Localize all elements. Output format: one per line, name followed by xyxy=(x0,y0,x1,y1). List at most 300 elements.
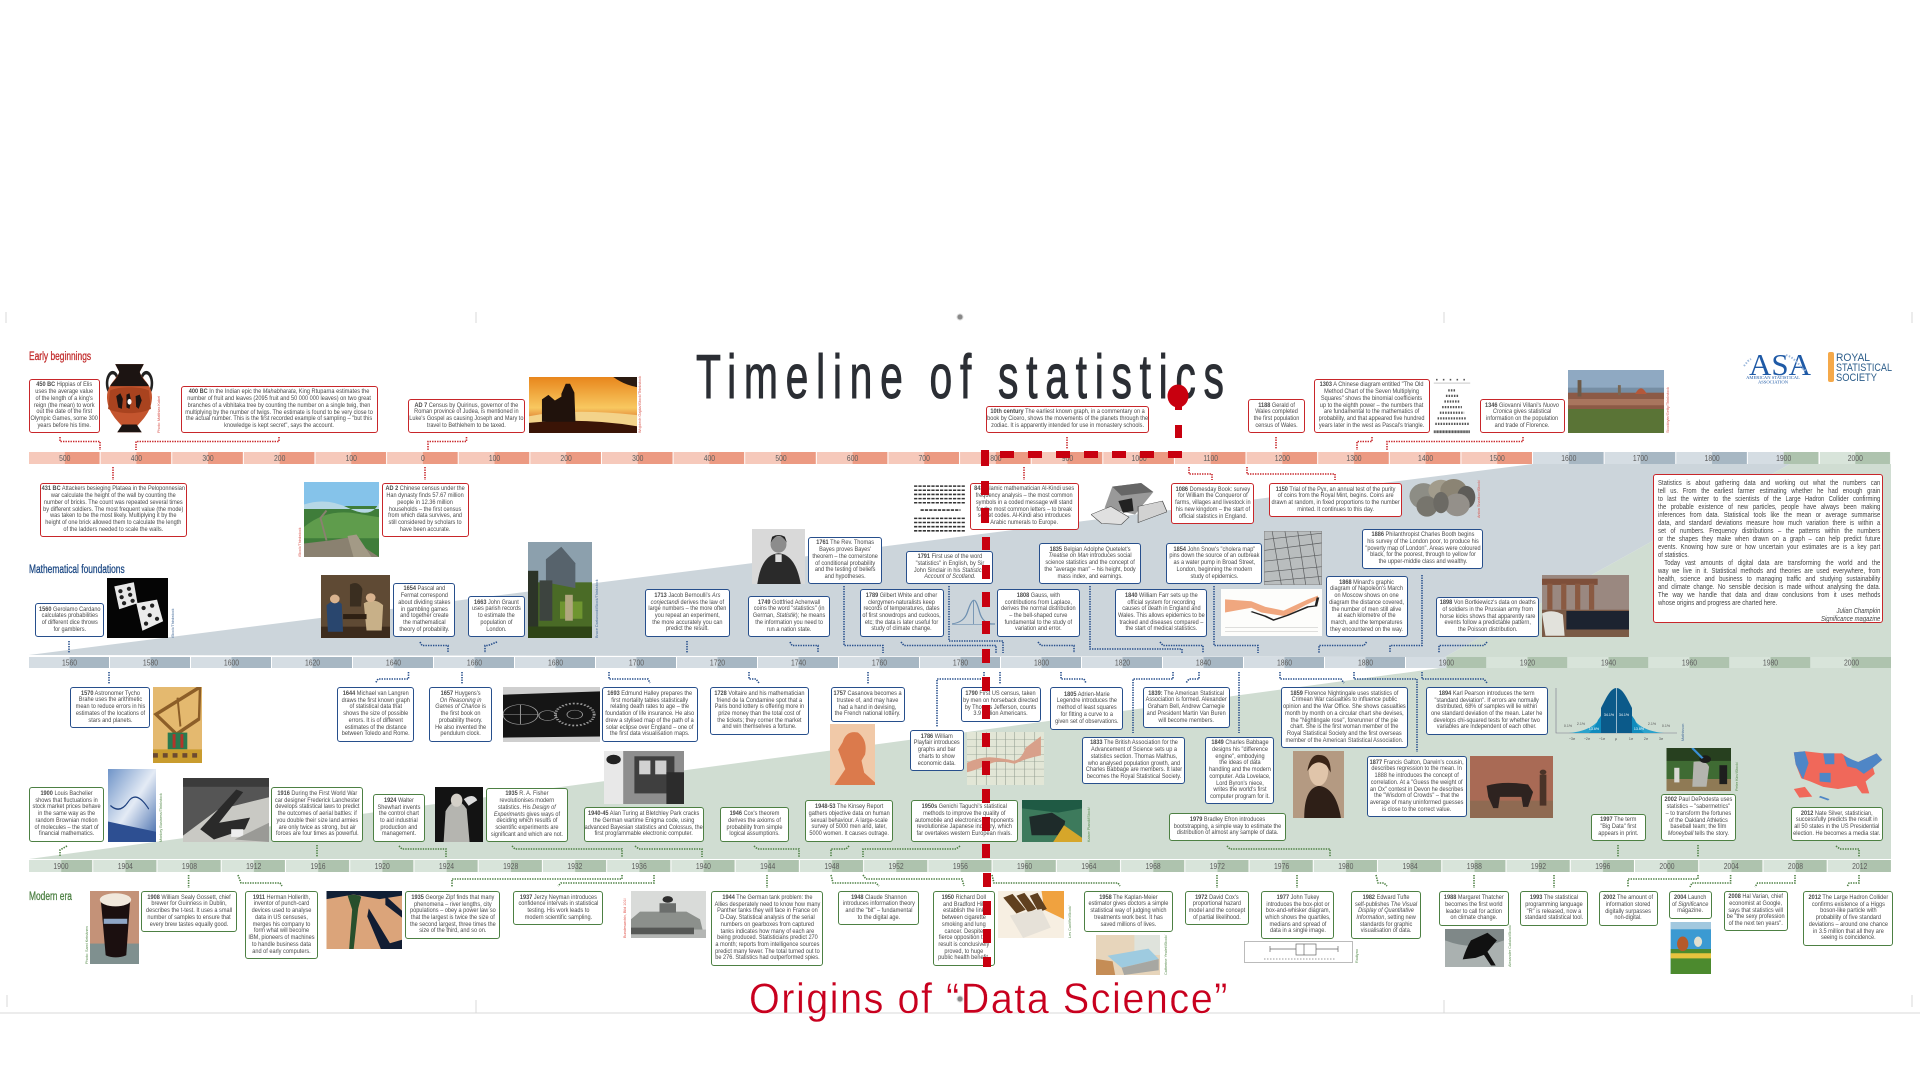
event: 1950 Doll and Hill: cancer. Despite xyxy=(945,928,983,934)
event: 431 BC Plataea: height of one brick allowed them to calculate the length xyxy=(45,519,182,526)
event: 1894 Pearson: one standard deviation of the mean. Later he xyxy=(1431,710,1543,717)
event: 1644 van Langren xyxy=(337,687,414,742)
event: 1898 Von Bortkiewicz: events follow a predictable pattern, xyxy=(1444,619,1531,626)
event: 1840 Farr: tracked and diseases compared – xyxy=(1119,619,1203,626)
timeline: 500 BC to AD 2000: 500 xyxy=(59,453,70,463)
timeline: 1560 to 2000: 1940 xyxy=(1601,658,1616,668)
event: 1849 Babbage: designs his "difference xyxy=(1212,746,1267,753)
event: 2012 Higgs boson xyxy=(1803,891,1893,946)
event: 1805 Legendre: for fitting a curve to a xyxy=(1060,711,1113,718)
image: Tycho Brahe quadrant xyxy=(153,687,202,763)
timeline: 1560 to 2000: 1760 xyxy=(872,658,887,668)
event: 1663 Graunt: 1663 John Graunt xyxy=(474,599,519,606)
event: 1859 Nightingale: 1859 Florence Nightingale uses statistics of xyxy=(1291,690,1398,697)
image: US election map xyxy=(1794,751,1882,800)
event: 1693 Halley: 1693 Edmund Halley prepares the xyxy=(608,690,692,697)
timeline: 500 BC to AD 2000: 400 xyxy=(704,453,715,463)
event: 1728 Voltaire: friend de la Condamine spot that a xyxy=(717,697,802,704)
event: 1948-53 Kinsey xyxy=(805,800,893,842)
event: 1894 Pearson: 1894 Karl Pearson introduces the term xyxy=(1439,690,1535,697)
event: 450 BC Hippias: Olympic Games, some 300 xyxy=(31,415,98,422)
image: Galton ox xyxy=(1470,756,1553,818)
event: 1713 Bernoulli: you repeat an experiment, xyxy=(655,612,720,619)
event: 400 BC sampling: number of fruit and leaves (2095 fruit and 50 000 000 leaves) on two great xyxy=(188,395,371,402)
event: 1654 Pascal and Fermat: in gambling games xyxy=(401,606,447,613)
event: 1786 Playfair: Playfair introduces xyxy=(914,739,960,746)
timeline: 1900 to 2012: 1984 xyxy=(1403,861,1418,871)
image: great wall of china xyxy=(304,482,379,557)
event: 1728 Voltaire: Paris bond lottery is offering more in xyxy=(715,703,804,710)
event: 1950 Doll and Hill: result is conclusively xyxy=(939,941,989,948)
event: 1877 Galton: average of many uninformed guesses xyxy=(1370,799,1464,806)
event: 1570 Tycho Brahe: estimates of the locations of xyxy=(75,710,145,717)
event: 1993 R language xyxy=(1520,891,1588,926)
event: 1713 Bernoulli: large numbers – the more often xyxy=(649,605,727,612)
event: 1935 Fisher: deciding which results of xyxy=(497,817,557,824)
event: AD 7 Census by Quirinus: Luke's Gospel as causing Joseph and Mary to xyxy=(409,415,524,422)
event: 1791 Sinclair: "statistics" in English, by Sir xyxy=(915,560,984,567)
event: 1086 Domesday Book: for William the Conqueror of xyxy=(1178,492,1247,499)
image: Arabic manuscript xyxy=(914,485,965,532)
event: 1560 Cardano: of different dice throws xyxy=(41,619,98,626)
event: 400 BC sampling: multiplying by the number of twigs. The estimate is found to be very close to xyxy=(186,408,373,416)
photo credits: Wojciech Gajda/iStock/Thinkstock xyxy=(638,376,642,433)
event: 1859 Nightingale: the "Nightingale rose", forerunner of the pie xyxy=(1291,716,1398,724)
event: 1728 Voltaire: and win themselves a fortune. xyxy=(722,723,797,730)
image: greek vase xyxy=(106,364,154,432)
timeline: 1900 to 2012: 1952 xyxy=(889,861,904,871)
event: 1786 Playfair: 1786 William xyxy=(921,733,953,740)
event: 1977 Tukey: medians and spread of xyxy=(1269,921,1326,928)
event: 1972 Cox: of partial likelihood. xyxy=(1193,914,1241,921)
event: 1908 Gosset: brewer for Guinness in Dublin, xyxy=(151,900,227,907)
event: 2012 Higgs boson: 2012 The Large Hadron Collider xyxy=(1808,894,1888,901)
event: 1849 Babbage: the ideas of data xyxy=(1219,759,1260,766)
event: 10th century graph: zodiac. It is apparently intended for use in monastery schools. xyxy=(991,422,1144,429)
event: 1900 Bachelier: stock market prices behave xyxy=(32,803,101,810)
photo credits: Catherine Yeulet/iStock/ xyxy=(1164,934,1168,975)
panel: introduction text: set of numbers. Frequency distributions – the patterns within the numbers xyxy=(1658,526,1880,535)
photo credits: Alexander Cakala/iStock/ xyxy=(1508,924,1512,967)
event: 1916 Lanchester: forces are four times as powerful. xyxy=(276,830,358,837)
timeline: 500 BC to AD 2000: 1400 xyxy=(1418,453,1433,463)
event: 1150 Trial of the Pyx: drawn at random, in fixed proportions to the number xyxy=(1271,499,1400,506)
event: 1757 Casanova: the French national lottery. xyxy=(835,710,901,717)
event: 1935 Fisher xyxy=(486,788,568,842)
event: AD 2 Chinese census: households – the first census xyxy=(389,506,462,513)
panel: introduction text: Significance magazine xyxy=(1821,614,1880,623)
event: 1977 Tukey: which shows the quartiles, xyxy=(1265,914,1330,921)
event: 1303 Chinese diagram: Squares" shows the binomial coefficients xyxy=(1321,395,1423,402)
timeline: 1900 to 2012: 1944 xyxy=(760,861,776,871)
event: 1086 Domesday Book: 1086 Domesday Book: survey xyxy=(1175,486,1250,493)
event: 450 BC Hippias: of the length of a king's xyxy=(36,395,93,402)
timeline: 1900 to 2012: 1904 xyxy=(118,861,133,871)
event: 1693 Halley xyxy=(602,687,698,742)
event: 2012 Higgs boson: boson-like particle with xyxy=(1820,907,1876,914)
panel: introduction text: the probable existence of new particles, people have always been making xyxy=(1658,502,1880,511)
event: 2002 DePodesta: statistics – "sabermetrics" xyxy=(1667,803,1730,810)
event: 1877 Galton: 1888 he introduces the concept of xyxy=(1375,772,1459,779)
timeline: 500 BC to AD 2000: 900 xyxy=(1062,453,1073,463)
event: AD 7 Census by Quirinus: Roman province of Judea, is mentioned in xyxy=(414,408,519,415)
event: 1693 Halley: relating death rates to age – the xyxy=(611,703,689,710)
event: 450 BC Hippias xyxy=(29,379,100,433)
event: 1839 American Statistical Association: and President Martin Van Buren xyxy=(1147,710,1226,717)
event: 1346 Villani xyxy=(1480,399,1565,433)
event: 1346 Villani: and trade of Florence. xyxy=(1495,422,1550,429)
event: 1560 Cardano: calculates probabilities xyxy=(41,612,98,619)
event: 431 BC Plataea xyxy=(40,483,187,537)
event: 1839 American Statistical Association: Association is formed. Alexander xyxy=(1146,696,1227,703)
event: 1188 Gerald of Wales: census of Wales. xyxy=(1255,422,1298,429)
event: 2002 digital storage: information stored xyxy=(1606,901,1651,908)
event: 2002 DePodesta: 2002 Paul DePodesta uses xyxy=(1665,796,1732,803)
event: 431 BC Plataea: 431 BC Attackers besieging Plataea in the Peloponnesian xyxy=(42,485,185,492)
event: 843 Al-Kindi: Arabic numerals to Europe. xyxy=(991,519,1058,526)
event: 1911 Hollerith xyxy=(245,891,318,959)
timeline: 1560 to 2000: 1900 xyxy=(1439,658,1454,668)
event: 1560 Cardano: for gamblers. xyxy=(53,626,86,633)
event: 1950s Taguchi: automobile and electronics components xyxy=(915,817,1014,824)
image: Guinness pint xyxy=(90,891,139,964)
event: 1937 Neyman xyxy=(513,891,603,925)
event: 1946 Cox: probability from simple xyxy=(727,824,782,830)
event: 1789 Gilbert White: 1789 Gilbert White and other xyxy=(866,592,938,599)
event: 1944 German tank problem xyxy=(711,891,823,966)
event: 1693 Halley: foundation of life insurance. He also xyxy=(606,710,694,717)
event: 1859 Nightingale: Crimean War casualties to influence public xyxy=(1292,696,1397,703)
connectors: mathematical foundations events to blue timeline xyxy=(69,575,1487,752)
event: AD 2 Chinese census xyxy=(382,483,469,537)
panel: introduction text: Julian Champkin xyxy=(1836,606,1880,615)
event: 2008 Varian xyxy=(1724,891,1788,931)
event: 1911 Hollerith: merges his company to xyxy=(253,921,310,928)
chart: normal distribution: 1σ xyxy=(1629,737,1634,741)
event: 1789 Gilbert White: records of temperatures, dates xyxy=(864,605,940,612)
timeline: 1900 to 2012: 1976 xyxy=(1274,861,1289,871)
event: 1950 Doll and Hill: and Bradford Hill xyxy=(943,901,985,908)
image: windblown tree xyxy=(1445,929,1504,967)
event: 2002 DePodesta: of the Oakland Athletics xyxy=(1669,816,1728,824)
event: 1886 Booth: the upper-middle class and wealthy. xyxy=(1378,558,1467,565)
event: 1911 Hollerith: inventor of punch-card xyxy=(254,900,309,907)
event: 1854 John Snow: 1854 John Snow's "cholera map" xyxy=(1173,546,1255,553)
event: 1808 Gauss: fundamental to the study of xyxy=(1005,619,1072,626)
chart: normal distribution: −3σ xyxy=(1569,737,1576,741)
event: 1972 Cox: 1972 David Cox's xyxy=(1195,894,1239,901)
event: 1940-45 Turing: 1940-45 Alan Turing at Bletchley Park cracks xyxy=(588,810,700,817)
event: 1948-53 Kinsey: 1948-53 The Kinsey Report xyxy=(815,803,883,810)
timeline: 500 BC to AD 2000: 1200 xyxy=(1275,453,1290,463)
timeline: 500 BC to AD 2000: 400 xyxy=(131,453,142,463)
event: 431 BC Plataea: number of bricks. The count was repeated several times xyxy=(44,499,183,506)
image: blue stock chart xyxy=(108,769,156,842)
event: 1849 Babbage: engine", embodying xyxy=(1215,753,1264,760)
timeline: 1560 to 2000: 1700 xyxy=(629,658,644,668)
chart: normal distribution: 13.6% xyxy=(1589,727,1600,731)
event: 431 BC Plataea: of the ladders needed to scale the walls. xyxy=(64,526,163,533)
event: 1859 Nightingale: Royal Statistical Society and the first overseas xyxy=(1287,730,1402,737)
event: 1898 Von Bortkiewicz: horse kicks shows that apparently rare xyxy=(1440,613,1535,620)
event: 1950 Doll and Hill: fierce opposition the xyxy=(939,934,989,941)
event: 431 BC Plataea: by different soldiers. The most frequent value (the mode) xyxy=(43,506,184,513)
event: 1150 Trial of the Pyx xyxy=(1269,483,1402,517)
event: 1859 Nightingale: chart. She is the first woman member of the xyxy=(1290,723,1399,730)
timeline: 1560 to 2000: 1920 xyxy=(1520,658,1535,668)
event: 1886 Booth: "poverty map of London". Areas were coloured xyxy=(1365,545,1480,552)
event: 1644 van Langren: draws the first known graph xyxy=(341,697,410,704)
event: 1946 Cox: 1946 Cox's theorem xyxy=(730,810,779,817)
timeline: 500 BC to AD 2000: 2000 xyxy=(1848,453,1863,463)
event: 1911 Hollerith: and of early computers. xyxy=(252,948,311,955)
event: 1877 Galton: 1877 Francis Galton, Darwin's cousin, xyxy=(1370,759,1464,766)
event: 1924 Shewhart xyxy=(373,794,425,842)
event: 1789 Gilbert White: clergymen-naturalists keep xyxy=(869,599,935,606)
event: 1757 Casanova: 1757 Casanova becomes a xyxy=(834,690,902,697)
wedge: grey mathematical foundations era xyxy=(29,464,1790,657)
image: Playfair chart xyxy=(967,732,1044,785)
event: 1911 Hollerith: form what will become xyxy=(254,927,309,934)
image: first world war planes xyxy=(183,778,269,842)
timeline: 1560 to 2000: 1980 xyxy=(1763,658,1778,668)
image: tank xyxy=(631,891,706,938)
timeline: 500 BC to AD 2000: 1300 xyxy=(1346,453,1362,463)
event: 1786 Playfair: economic data. xyxy=(918,760,956,767)
chart: normal distribution: 13.6% xyxy=(1634,727,1645,731)
event: 2008 Varian: economist at Google, xyxy=(1730,900,1782,907)
event: 1900 Bachelier: of molecules – the start of xyxy=(34,824,99,831)
event: 1693 Halley: solar eclipse over England – one of xyxy=(606,724,694,731)
timeline: 1560 to 2000: 1820 xyxy=(1115,658,1130,668)
event: 2012 Higgs boson: confirms existence of a Higgs xyxy=(1811,901,1885,908)
photo credits: Bundesarchiv, Bild 101I xyxy=(623,898,627,938)
event: 1570 Tycho Brahe: mean to reduce errors in his xyxy=(75,703,145,710)
heading: early beginnings: Early beginnings xyxy=(29,351,91,363)
event: 1868 Minard: 1868 Minard's graphic xyxy=(1340,579,1394,586)
red marker dot xyxy=(1168,384,1188,408)
timeline: 500 BC to AD 2000: 700 xyxy=(919,453,930,463)
event: 2012 Nate Silver: successfully predicts the result in xyxy=(1796,816,1878,823)
event: 1839 American Statistical Association: will become members. xyxy=(1159,717,1214,724)
event: 1570 Tycho Brahe xyxy=(70,687,150,728)
event: 1713 Bernoulli xyxy=(645,589,730,637)
timeline: 1900 to 2012: 1920 xyxy=(375,861,390,871)
event: 1988 Thatcher: on climate change. xyxy=(1451,914,1497,921)
timeline: 500 BC to AD 2000: 1100 xyxy=(1203,453,1218,463)
event: 1935 Fisher: statistics. His Design of xyxy=(498,804,556,811)
event: 1849 Babbage: 1849 Charles Babbage xyxy=(1211,739,1268,746)
event: 1868 Minard: they encountered on the way. xyxy=(1331,626,1403,633)
event: 1977 Tukey: data in a single image. xyxy=(1270,927,1325,934)
event: 1835 Quetelet: 1835 Belgian Adolphe Quetelet's xyxy=(1050,546,1130,553)
panel: introduction text: health, science and business to managing traffic and studying sustainability xyxy=(1658,574,1880,583)
photo credits: iStock/Thinkstock xyxy=(171,608,175,638)
event: 1693 Halley: the first data visualisation maps. xyxy=(610,730,690,737)
event: AD 7 Census by Quirinus: AD 7 Census by Quirinus, governor of the xyxy=(415,402,518,409)
event: 1868 Minard: on Moscow shows on one xyxy=(1335,592,1399,599)
event: 1911 Hollerith: devices used to analyse xyxy=(252,907,311,914)
event: 1950 Doll and Hill xyxy=(933,891,995,966)
panel: introduction text: Statistics is about gathering data and working out what the numbers can xyxy=(1658,478,1880,487)
event: 1833 British Association: Advancement of Science sets up a xyxy=(1090,746,1177,753)
event: 1728 Voltaire: prize money than the total cost of xyxy=(718,710,801,717)
timeline: 1560 to 2000: 1660 xyxy=(467,658,482,668)
panel: introduction text: and climate change. No sensible decision is made without analysing the data. xyxy=(1658,582,1880,591)
event: 1859 Nightingale: opinion and the War Office. She shows casualties xyxy=(1283,703,1406,710)
event: 1654 Pascal and Fermat: Fermat correspond xyxy=(400,592,448,599)
event: 2012 Nate Silver: election. He becomes a media star. xyxy=(1793,830,1881,837)
event: 1944 German tank problem: D-Day. Statistical analysis of the serial xyxy=(720,914,814,921)
timeline: 1560 to 2000: 1800 xyxy=(1034,658,1049,668)
event: 843 Al-Kindi xyxy=(970,483,1079,530)
event: 1900 Bachelier: 1900 Louis Bachelier xyxy=(40,790,93,797)
timeline: 1900 to 2012: 2012 xyxy=(1852,861,1867,871)
event: 1944 German tank problem: being produced. Statisticians predict 270 xyxy=(717,934,817,941)
event: 2008 Varian: be "the sexy profession xyxy=(1727,913,1785,920)
event: 1900 Bachelier: in the same way as the xyxy=(38,810,95,817)
event: 1790 first US census: 3.9 million Americans. xyxy=(974,710,1028,717)
event: 1713 Bernoulli: predict the result. xyxy=(666,625,709,632)
event: 1944 German tank problem: be 276. Statistics had outperformed spies. xyxy=(715,954,819,961)
image: dice xyxy=(107,578,168,638)
event: 1982 Tufte xyxy=(1351,891,1421,939)
event: 1749 Achenwall: 1749 Gottfried Achenwall xyxy=(758,599,820,606)
event: 1346 Villani: 1346 Giovanni Villani's Nuovo xyxy=(1485,402,1560,409)
timeline: 1900 to 2012: 1948 xyxy=(824,861,839,871)
event: 1805 Legendre: Legendre introduces the xyxy=(1056,697,1117,704)
event: 1946 Cox: derives the axioms of xyxy=(728,817,781,824)
event: 1663 Graunt: London. xyxy=(486,626,507,633)
event: 1663 Graunt: population of xyxy=(480,619,513,626)
event: 1657 Huygens: He also invented the xyxy=(435,724,486,731)
chart: normal distribution: μ xyxy=(1615,737,1617,741)
photo credits: Les Cunliffe/iStock/ xyxy=(1068,905,1072,938)
connectors: early beginnings events to red timeline xyxy=(60,437,1523,480)
event: 1972 Cox: model and the concept xyxy=(1189,907,1245,914)
event: 1950s Taguchi xyxy=(911,800,1018,842)
chart: normal distribution: 2.1% xyxy=(1577,722,1586,726)
event: 1789 Gilbert White: etc; the data is later useful for xyxy=(865,619,939,626)
panel: introduction text: The way we handle that data and draw conclusions from it uses methods xyxy=(1658,590,1880,599)
event: 1693 Halley: drew a stylised map of the path of a xyxy=(606,717,694,724)
event: 2012 Higgs boson: seeing is coincidence. xyxy=(1821,934,1875,941)
photo credits: Stockbyte/Getty/Thinkstock xyxy=(1666,387,1670,433)
event: 1908 Gosset: number of samples to ensure that xyxy=(147,914,231,921)
timeline: 1900 to 2012: 1916 xyxy=(310,861,326,871)
event: 1948 Shannon: introduces information theory xyxy=(842,900,915,907)
event: 1808 Gauss: derives the normal distribution xyxy=(1001,605,1076,612)
timeline: 500 BC to AD 2000: 0 xyxy=(421,453,425,463)
timeline: 500 BC to AD 2000: 100 xyxy=(346,453,357,463)
event: 1935 Zipf: phenomena – river lengths, city xyxy=(414,901,491,908)
event: 1663 Graunt: uses parish records xyxy=(472,605,521,612)
event: 1303 Chinese diagram: 1303 A Chinese diagram entitled "The Old xyxy=(1320,381,1424,388)
event: 1937 Neyman: modern scientific sampling. xyxy=(524,914,592,921)
event: 1911 Hollerith: to handle business data xyxy=(252,941,311,948)
event: 1908 Gosset xyxy=(141,891,237,932)
event: 1303 Chinese diagram: up to the eighth power – the numbers that xyxy=(1320,402,1424,409)
event: 1894 Pearson: develops chi-squared tests for whether two xyxy=(1434,717,1540,724)
timeline: 500 BC to AD 2000: 200 xyxy=(274,453,285,463)
event: 1839 American Statistical Association: 1839: The American Statistical xyxy=(1149,690,1224,697)
timeline: 1560 to 2000: 1960 xyxy=(1682,658,1697,668)
event: 2002 digital storage: 2002 The amount of xyxy=(1604,894,1653,901)
event: 1854 John Snow xyxy=(1166,543,1262,584)
event: 1940-45 Turing: first programmable electronic computer. xyxy=(595,830,693,837)
event: 10th century graph: book by Cicero, shows the movements of the planets through the xyxy=(987,415,1148,422)
event: 450 BC Hippias: years before his time. xyxy=(38,422,91,429)
event: 1761 Bayes: of conditional probability xyxy=(815,560,875,566)
event: 2004 Significance launch: 2004 Launch xyxy=(1674,894,1707,901)
event: 1713 Bernoulli: 1713 Jacob Bernoulli's Ars xyxy=(654,592,721,599)
event: 1657 Huygens xyxy=(429,687,492,742)
event: 1916 Lanchester: car designer Frederick Lanchester xyxy=(275,797,359,804)
event: 400 BC sampling: branches of a vibhitaka tree by counting the number on a single twig, then xyxy=(188,402,371,409)
event: 1791 Sinclair: 1791 First use of the word xyxy=(917,553,982,560)
event: 1988 Thatcher: becomes the first world xyxy=(1445,901,1503,908)
timeline: 1560 to 2000: 2000 xyxy=(1844,658,1859,668)
event: 1982 Tufte: self-publishes The Visual xyxy=(1355,901,1417,908)
event: 2002 DePodesta: – to transform the fortunes xyxy=(1666,810,1731,817)
event: 400 BC sampling: 400 BC In the Indian epic the Mahabharata, King Rtuparna estimates the xyxy=(189,388,370,395)
event: 1935 Fisher: scientific experiments are xyxy=(495,824,559,831)
event: 1982 Tufte: visualisation of data. xyxy=(1361,927,1411,934)
image: Domesday Book xyxy=(1091,483,1167,525)
panel: introduction text xyxy=(1653,474,1883,623)
event: 2012 Nate Silver: all 50 states in the US Presidential xyxy=(1794,823,1880,830)
event: 1950 Doll and Hill: public health benefit. xyxy=(938,954,990,961)
event: 1924 Shewhart: Shewhart invents xyxy=(378,804,420,811)
photo credits: Mathisson xyxy=(1681,724,1685,741)
event: 1982 Tufte: standards for graphic xyxy=(1360,921,1412,928)
event: 1713 Bernoulli: conjectandi derives the law of xyxy=(651,599,724,606)
event: 1916 Lanchester: are only twice as strong, but air xyxy=(278,824,356,831)
event: 1894 Pearson: variables are independent of each other. xyxy=(1437,723,1537,730)
event: 1835 Quetelet: the "average man" – his height, body xyxy=(1044,566,1136,573)
event: 1728 Voltaire xyxy=(710,687,809,735)
event: 1790 first US census xyxy=(961,687,1041,722)
event: 1657 Huygens: pendulum clock. xyxy=(440,730,481,737)
event: 1935 Fisher: Experiments gives ways of xyxy=(494,811,560,818)
event: 1761 Bayes: Bayes proves Bayes' xyxy=(819,546,871,553)
event: AD 2 Chinese census: still considered by scholars to xyxy=(389,519,462,526)
title: Timeline of statistics xyxy=(696,343,1224,412)
connectors: modern era events to green timeline xyxy=(60,845,1859,888)
event: 1940-45 Turing: advanced Bayesian statistics and Colossus, the xyxy=(585,824,703,830)
chart: box plot xyxy=(1244,941,1353,963)
event: 1833 British Association: statistics section. Thomas Malthus, xyxy=(1090,753,1177,760)
event: 1757 Casanova: trustee of, and may have xyxy=(837,697,899,704)
event: 1854 John Snow: pins down the source of an outbreak xyxy=(1169,552,1259,559)
event: 1979 Efron: bootstrapping, a simple way to estimate the xyxy=(1174,823,1281,830)
event: 1877 Galton xyxy=(1367,756,1467,817)
event: 1977 Tukey: box-and-whisker diagram, xyxy=(1265,907,1330,914)
event: 1749 Achenwall: coins the word "statistics" (in xyxy=(754,605,824,612)
event: 1972 Cox xyxy=(1185,891,1249,925)
event: 1693 Halley: first mortality tables statistically xyxy=(612,697,688,704)
event: 1977 Tukey: 1977 John Tukey xyxy=(1276,894,1319,901)
event: 1993 R language: standard statistical tool. xyxy=(1525,914,1583,921)
event: 1935 Fisher: revolutionises modern xyxy=(500,797,554,804)
event: 1840 Farr: 1840 William Farr sets up the xyxy=(1125,592,1197,599)
event: 1877 Galton: is close to the correct value. xyxy=(1382,806,1452,813)
event: 1849 Babbage: Lord Byron's niece, xyxy=(1216,780,1263,787)
event: 843 Al-Kindi: frequency analysis – the most common xyxy=(976,492,1073,499)
event: 1908 Gosset: describes the t-test. It uses a small xyxy=(146,907,232,914)
event: 1916 Lanchester: 1916 During the First World War xyxy=(277,790,357,797)
event: 1791 Sinclair xyxy=(906,551,993,584)
